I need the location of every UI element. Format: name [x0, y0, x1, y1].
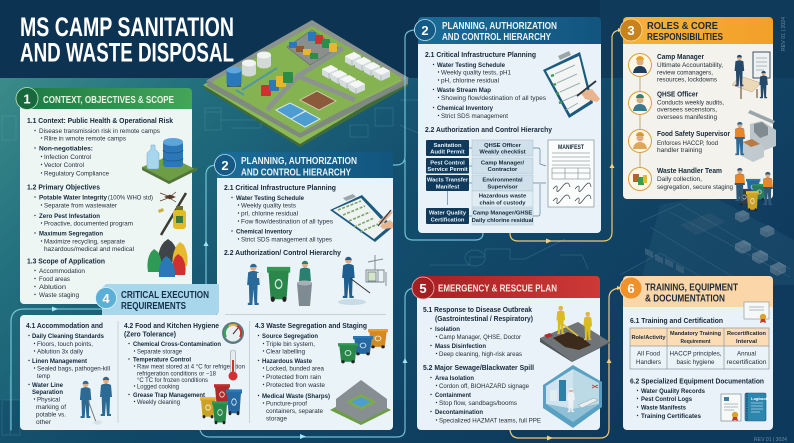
heading [645, 282, 738, 304]
owner: environmental supervisor: Environmental [482, 178, 523, 184]
section 1.1: Rlire in wmote remote camps [44, 136, 126, 142]
section 4.3: Puncture-proof [266, 400, 307, 408]
panel: planning, authorization and control hierarchy (detail) [414, 17, 601, 233]
owner: camp manager: Contractor [488, 167, 518, 173]
section 1.1: 1.1 Context: Public Health & Operational Risk [27, 116, 174, 125]
section 4.3: containers, separate [266, 408, 324, 415]
role: QHSE officer [657, 90, 724, 121]
table data row: Annual [737, 350, 756, 358]
panel 2 badge [214, 154, 236, 176]
manifest document: MANIFEST [558, 144, 584, 151]
section 1.2: hazardous/medical and medical [44, 246, 134, 253]
icon: logbook [745, 393, 769, 421]
illustration: isometric camp [203, 20, 408, 147]
section 1.2: Proactive, documented program [44, 220, 133, 228]
role: waste handler team: Waste Handler Team [657, 166, 722, 175]
icon: thermometer [228, 350, 238, 380]
section 2.1: 2.1 Critical Infrastructure Planning [224, 183, 336, 192]
section 6.2: Training Certificates [641, 413, 702, 420]
table header row: Mandatory Training [670, 331, 721, 337]
heading: RESPONSIBILITIES [647, 32, 723, 43]
section 1.3: Ablution [39, 284, 67, 291]
panel 4 header [102, 284, 219, 315]
panel 4 heading: CRITICAL EXECUTION [121, 290, 209, 301]
panel: training, equipment and documentation [620, 276, 773, 430]
section 4.2: Raw meat stored at 4 °C for refrigeration [137, 364, 246, 370]
icon: segregation bins [338, 329, 388, 363]
icon: water testing apparatus [366, 255, 386, 286]
panel: critical execution requirements [20, 284, 393, 430]
section 2.1: 2.1 Critical Infrastructure Planning [425, 50, 536, 59]
section 2.1: Water Testing Schedule [437, 62, 506, 69]
section 4.3: Medical Waste (Sharps) [262, 393, 330, 400]
badge [620, 277, 642, 299]
role: food safety supervisor [657, 129, 730, 154]
header [623, 276, 773, 307]
section 1.2: Potable Water Integrity [39, 194, 108, 202]
panel 1 header [25, 88, 192, 109]
owner: environmental supervisor: Supervisor [487, 184, 518, 190]
revision tag: REV 01 | 3024 [754, 437, 787, 443]
title: AND WASTE DISPOSAL [20, 38, 234, 68]
section 2.1: Waste Stream Map [437, 87, 491, 94]
permit: sanitation audit [426, 140, 469, 156]
section 4.1: other [36, 419, 51, 426]
section 4.2: Grease Trap Management [133, 392, 205, 399]
section 6.2 [630, 376, 764, 420]
panel 2 heading: AND CONTROL HIERARCHY [241, 168, 351, 178]
header [417, 276, 600, 298]
badge [412, 277, 434, 299]
icon: water tank and bottle [142, 138, 197, 184]
section 1.3: Waste staging [39, 292, 80, 299]
heading [647, 21, 723, 43]
section 5.2: Specialized HAZMAT teams, full PPE [439, 418, 541, 424]
icon: food-area bins [200, 384, 242, 424]
section 4.3: Protected fron waste [266, 382, 326, 389]
icon: signed checklist clipboard [543, 51, 600, 118]
section 4.2: Chemical Cross-Contamination [133, 341, 221, 348]
panel 1 badge: 1 [23, 92, 31, 106]
section 1.3: 1.3 Scope of Application [27, 256, 105, 266]
permit: water quality [426, 208, 469, 224]
section 1.1: Disease transmission risk in remote camps [39, 128, 160, 135]
section 2.1: prl, chlorine residual [241, 210, 298, 218]
section 1.3 [27, 256, 105, 299]
section 4.3: Triple bin system, [266, 341, 315, 348]
role: camp manager: review comanagers, [657, 70, 713, 76]
section 1.2: Maximize recycling, separate [44, 238, 126, 246]
table data row: recertification [726, 359, 767, 366]
section 6.2: 6.2 Specialized Equipment Documentation [630, 376, 764, 386]
section 5.1: Camp Manager, QHSE, Doctor [439, 334, 521, 341]
section 1.1: Vector Control [44, 162, 84, 169]
panel: emergency and rescue plan [412, 276, 610, 430]
role: QHSE officer: Conducts weekly audits, [657, 100, 724, 106]
permit: waste transfer: Wacts Transfer [427, 178, 469, 184]
heading: EMERGENCY & RESCUE PLAN [438, 284, 557, 294]
section 6.2: Waste Manifests [641, 404, 687, 412]
icon: record document [721, 394, 741, 421]
owner: chain of custody [472, 191, 533, 207]
section 2.1: Strict SDS management [441, 113, 508, 120]
section 5.2: 5.2 Major Sewage/Blackwater Spill [423, 363, 534, 372]
table data row [636, 350, 767, 366]
section 4.1: Linen Management [32, 358, 87, 365]
section 5.2: Area Isolation [435, 375, 474, 382]
heading: & DOCUMENTATION [645, 294, 725, 304]
section 2.1: pH, chlorine residual [441, 78, 499, 84]
section 2.2 heading: 2.2 Authorization and Control Hierarchy [425, 125, 553, 134]
role: waste handler team: Daily collection, [657, 176, 702, 183]
connector arrows [11, 28, 623, 440]
section 1.2 [27, 182, 153, 253]
section 4.3: Source Segregation [262, 333, 318, 340]
section 5.1: Deep cleaning, high-risk areas [439, 351, 522, 358]
owner: daily chlorine residual: Daily chlorine residual [472, 218, 534, 224]
title: MS CAMP SANITATION [20, 12, 234, 42]
section 4.1: potable vs. [36, 412, 66, 418]
section 4.1: Sealed bags, pathogen-kill [37, 366, 110, 372]
panel 4 heading [121, 290, 209, 312]
avatar: camp manager [628, 54, 652, 76]
role: camp manager: Camp Manager [657, 52, 704, 61]
icon: clipboard [330, 194, 393, 242]
table header row: Recertification [727, 331, 766, 337]
section 4.2: Separate storage [137, 348, 183, 356]
role: camp manager: resources, lockdowns [657, 76, 717, 84]
table data row: HACCP principles, [670, 350, 722, 358]
illustration: waste handlers and bins [735, 168, 773, 211]
icon: temperature gauge [222, 322, 244, 344]
panel 2 heading [241, 156, 357, 178]
permit: pest control [426, 158, 469, 174]
section 2.1: Weekly quality tests [241, 202, 296, 210]
section 4.1 [26, 321, 110, 426]
section 2.1: Water Testing Schedule [236, 195, 305, 202]
section 1.2: (100% WHO std) [108, 194, 153, 202]
owner: chain of custody: Hazardous waste [479, 194, 527, 200]
owner: QHSE officer: Weakly checklist [479, 150, 526, 156]
owner: daily chlorine residual: Camp Manager/GHSE [473, 210, 532, 216]
table data row: basic hygiene [676, 359, 715, 366]
heading: TRAINING, EQUIPMENT [645, 282, 738, 294]
table header row: Requirement [680, 339, 711, 345]
icon: waste bags [147, 239, 188, 277]
section 1.2: Separate from wastewater [44, 202, 117, 210]
role: QHSE officer: QHSE Officer [657, 90, 698, 98]
avatar: waste handler [628, 168, 652, 190]
section 4.3: Protected from rain [266, 374, 322, 381]
badge: 3 [627, 23, 635, 38]
section 1.2: Zero Pest Infestation [39, 213, 100, 220]
icon: worker with tablet [247, 264, 264, 305]
section 4.3 [255, 321, 367, 422]
section 5.2: Decontamination [435, 409, 483, 416]
heading: AND CONTROL HIERARCHY [442, 32, 551, 43]
owner: daily chlorine residual [472, 208, 534, 225]
manifest document [548, 140, 594, 207]
section 1.1: Regulatory Compliance [44, 170, 110, 178]
section 1.1: Non-negotiables: [39, 146, 93, 152]
owner: camp manager: Camp Manager/ [481, 160, 524, 166]
owner: chain of custody: chain of custody [479, 200, 526, 206]
section 4.1: temp [37, 373, 51, 380]
heading [442, 21, 557, 43]
section 4.1: Daily Cleaning Standards [32, 333, 105, 340]
section 2.1: Showing flow/destination of all types [441, 95, 546, 102]
section 5.2: Cordon off, BIOHAZARD signage [439, 383, 530, 390]
section 2.1: Chemical Inventory [437, 105, 494, 112]
section 4.1: Ablution 3x daily [37, 348, 84, 356]
panel 2 header [217, 152, 393, 178]
permit: pest control: Pest Control [430, 160, 465, 166]
section 5.1: Mass Disinfection [435, 343, 486, 350]
section 4.2: °C TC for frozen conditions [137, 377, 208, 384]
permit: waste transfer [426, 175, 469, 191]
table data row: Handlers [636, 359, 661, 366]
icon: bunded containment pit [330, 380, 391, 425]
revision tag vertical: REV 01 | 2024 [781, 17, 787, 51]
table header row: Role/Activity [632, 335, 666, 341]
section 4.3: storage [266, 416, 288, 422]
panel 4 badge [96, 288, 116, 308]
section 4.2: refrigeration conditions or −18 [137, 370, 217, 378]
panel 4 heading: REQUIREMENTS [121, 301, 186, 312]
panel: context, objectives and scope [16, 88, 197, 304]
icon: pest control sprayer [158, 192, 186, 235]
section 2.1: Weekly quality tests, pH1 [441, 70, 512, 76]
section 6.2: Pest Control Logs [641, 396, 693, 403]
role: QHSE officer: oversees secenstors, [657, 106, 717, 114]
avatar: QHSE officer [628, 92, 652, 114]
panel: planning, authorization (central) [214, 152, 393, 315]
section 4.2: Weekly cleaning [137, 399, 181, 406]
owner: environmental supervisor [472, 175, 533, 191]
section 2.1: Chemical Inventory [236, 228, 293, 236]
section 5.2: Stop flow, sandbags/booms [439, 400, 517, 407]
section 5.2: Containment [435, 392, 471, 399]
role: food safety supervisor: Enforces HACCP, food [657, 140, 719, 147]
title [20, 12, 234, 68]
section 4.3: Hazardous Waste [262, 358, 313, 365]
panel 2 heading: PLANNING, AUTHORIZATION [241, 156, 357, 167]
role: QHSE officer: oversees manifesting [657, 114, 718, 121]
heading: PLANNING, AUTHORIZATION [442, 21, 557, 32]
section 4.2: (Zero Tolerance) [124, 330, 176, 338]
panel 2 badge: 2 [221, 158, 229, 173]
owner: camp manager [472, 158, 533, 174]
section 2.1 [224, 183, 336, 244]
section 1.1: Infection Control [44, 154, 91, 161]
section 5.1 [423, 305, 533, 358]
panel 1 heading: CONTEXT, OBJECTIVES & SCOPE [43, 95, 174, 106]
training table [630, 328, 769, 369]
icon: logbook: Logbook [751, 396, 769, 401]
permit: sanitation audit: Audit Permit [430, 150, 465, 156]
section 4.2: 4.2 Food and Kitchen Hygiene [124, 321, 219, 330]
section 2.1: Fow flow/destination of all types [241, 218, 333, 226]
badge [620, 19, 642, 41]
badge [414, 20, 436, 40]
section 4.1: marking of [36, 404, 66, 411]
section 4.1: Floors, touch points, [37, 341, 93, 348]
icon: worker with pressure washer [338, 257, 370, 305]
illustration: kitchen inspection [735, 110, 776, 162]
permit: water quality: Water Quality [429, 210, 467, 216]
role: food safety supervisor: handler training [657, 147, 703, 154]
section 5.2 [423, 363, 541, 424]
owner: QHSE officer: QHSE Officer [484, 143, 522, 149]
section 4.3: Clear labelling [266, 348, 306, 356]
badge: 5 [419, 281, 427, 296]
section 2.1: Strict SDS management all types [241, 236, 332, 244]
role: food safety supervisor: Food Safety Supervisor [657, 129, 730, 138]
illustration: desk and managers [732, 52, 770, 99]
panel 1 badge [16, 88, 38, 110]
section 4.3: 4.3 Waste Segregation and Staging [255, 321, 367, 330]
section 1.3: Food areas [39, 276, 70, 283]
icon: worker at waste drum [297, 261, 312, 306]
panel 4 badge: 4 [102, 291, 110, 306]
permit: pest control: Service Permit [427, 167, 468, 173]
section 4.1: 4.1 Accommodation and [26, 321, 103, 330]
icon: certificate [744, 302, 769, 323]
badge: 6 [627, 281, 635, 296]
section 5.1: Isolation [435, 326, 460, 333]
illustration: hazmat spill response [540, 306, 610, 362]
panel: roles and core responsibilities [620, 17, 776, 211]
badge: 2 [421, 23, 429, 38]
section 4.2: Logged cooking [137, 384, 180, 390]
permit: waste transfer: Manifest [436, 184, 459, 190]
section 5.1: 5.1 Response to Disease Outbreak [423, 305, 533, 314]
role: waste handler team [657, 166, 734, 191]
section 1.2: Maximum Segregation [39, 230, 103, 238]
section 4.2 [124, 321, 246, 406]
illustration: decontaminated room [543, 365, 602, 428]
section 4.1: Water Line [32, 382, 64, 389]
icon: cleaning workers [80, 377, 112, 425]
section 6.1 heading: 6.1 Training and Certification [630, 316, 723, 325]
faint camp illustration lower right [640, 195, 794, 285]
section 4.2: Temperature Control [133, 356, 191, 364]
section 1.1 [27, 116, 174, 178]
permit hierarchy chart [426, 140, 546, 225]
header [418, 17, 601, 44]
section 1.3: Accommodation [39, 268, 86, 275]
section 6.2: Water Quality Records [641, 388, 706, 395]
permit: sanitation audit: Sanitation [433, 143, 462, 149]
icon: green wheelie bin [267, 267, 290, 302]
section 4.1: Physical [37, 396, 60, 404]
owner: QHSE officer [472, 140, 533, 156]
role: waste handler team: segregation, secure staging [657, 184, 734, 191]
section 4.3: Locked, bunded area [266, 366, 325, 372]
section 4.1: Separation [32, 389, 63, 396]
section 5.1: (Gastrointestinal / Respiratory) [435, 314, 533, 323]
role: camp manager: Ultimate Accountability, [657, 62, 723, 69]
table data row: All Food [637, 350, 661, 358]
avatar: food safety supervisor [628, 130, 652, 152]
section 1.2: 1.2 Primary Objectives [27, 182, 100, 192]
table header row: Interval [736, 339, 757, 345]
faint blueprint backdrop [2, 100, 790, 435]
section 2.2 heading: 2.2 Authorization/ Control Hierarchy [224, 248, 342, 257]
heading: ROLES & CORE [647, 21, 718, 32]
role: camp manager [657, 52, 723, 84]
section 2.1 [425, 50, 546, 120]
table header row [632, 331, 766, 345]
permit: water quality: Certification [431, 218, 465, 224]
header [623, 17, 773, 44]
